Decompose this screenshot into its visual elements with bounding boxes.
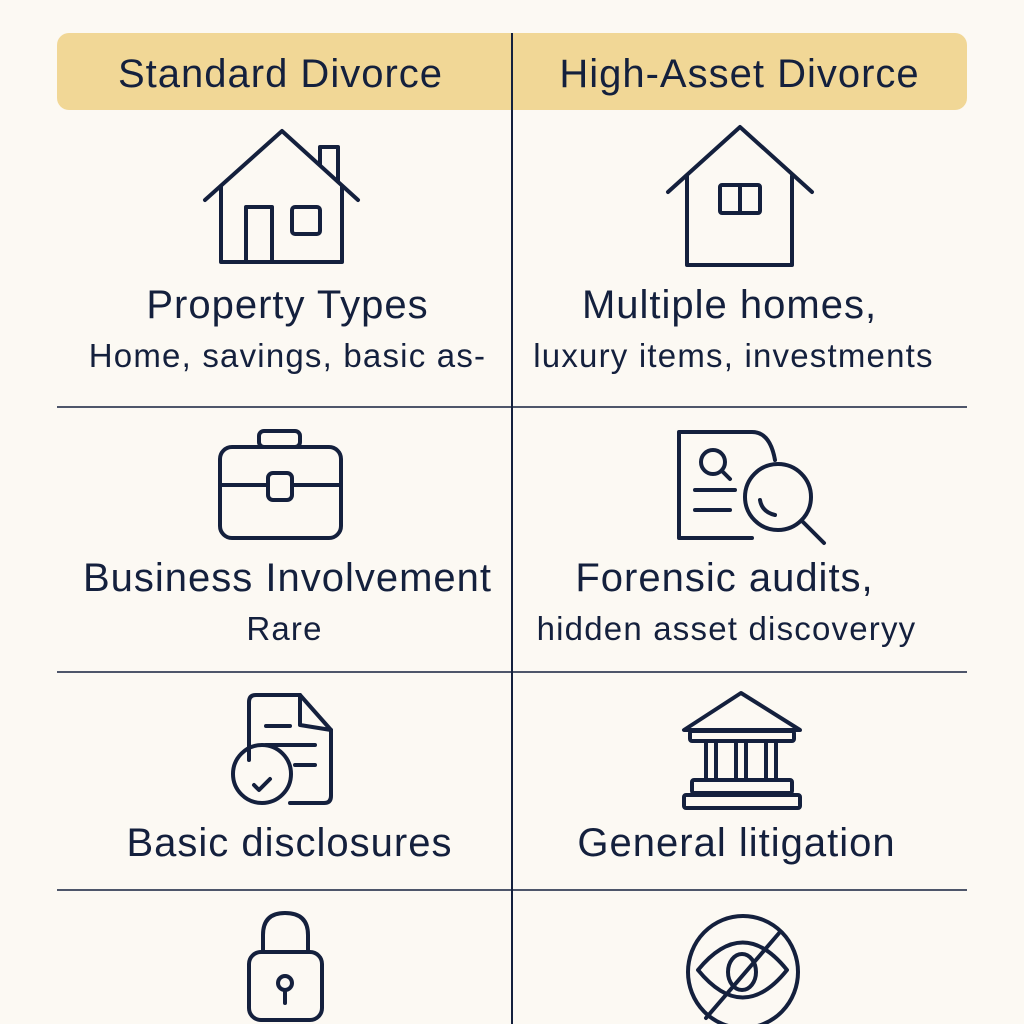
text: Business Involvement <box>83 556 492 600</box>
heading: standard: Standard Divorce <box>118 52 443 96</box>
icon: courthouse <box>684 693 800 808</box>
text: Multiple homes, <box>582 283 877 327</box>
text: Rare <box>246 610 323 647</box>
text: Forensic audits, <box>575 556 874 600</box>
icon: lock <box>249 913 322 1020</box>
text: basic disclosures: Basic disclosures <box>126 821 452 865</box>
text: forensic audits <box>537 556 916 647</box>
text: Home, savings, basic as- <box>89 337 486 374</box>
icon: document check <box>233 695 331 803</box>
icon: house right <box>668 127 812 265</box>
text: property types <box>89 283 486 374</box>
text: Property Types <box>146 283 429 327</box>
icon: eye crossed <box>688 916 798 1024</box>
text: multiple homes <box>533 283 934 374</box>
header bar <box>57 33 967 110</box>
heading: high-asset: High-Asset Divorce <box>559 52 920 96</box>
text: business involvement <box>83 556 492 647</box>
text: luxury items, investments <box>533 337 934 374</box>
text: hidden asset discoveryy <box>537 610 916 647</box>
text: general litigation: General litigation <box>577 821 896 865</box>
icon: briefcase <box>220 431 341 538</box>
icon: house left <box>205 131 358 262</box>
icon: document magnifier <box>679 432 824 543</box>
